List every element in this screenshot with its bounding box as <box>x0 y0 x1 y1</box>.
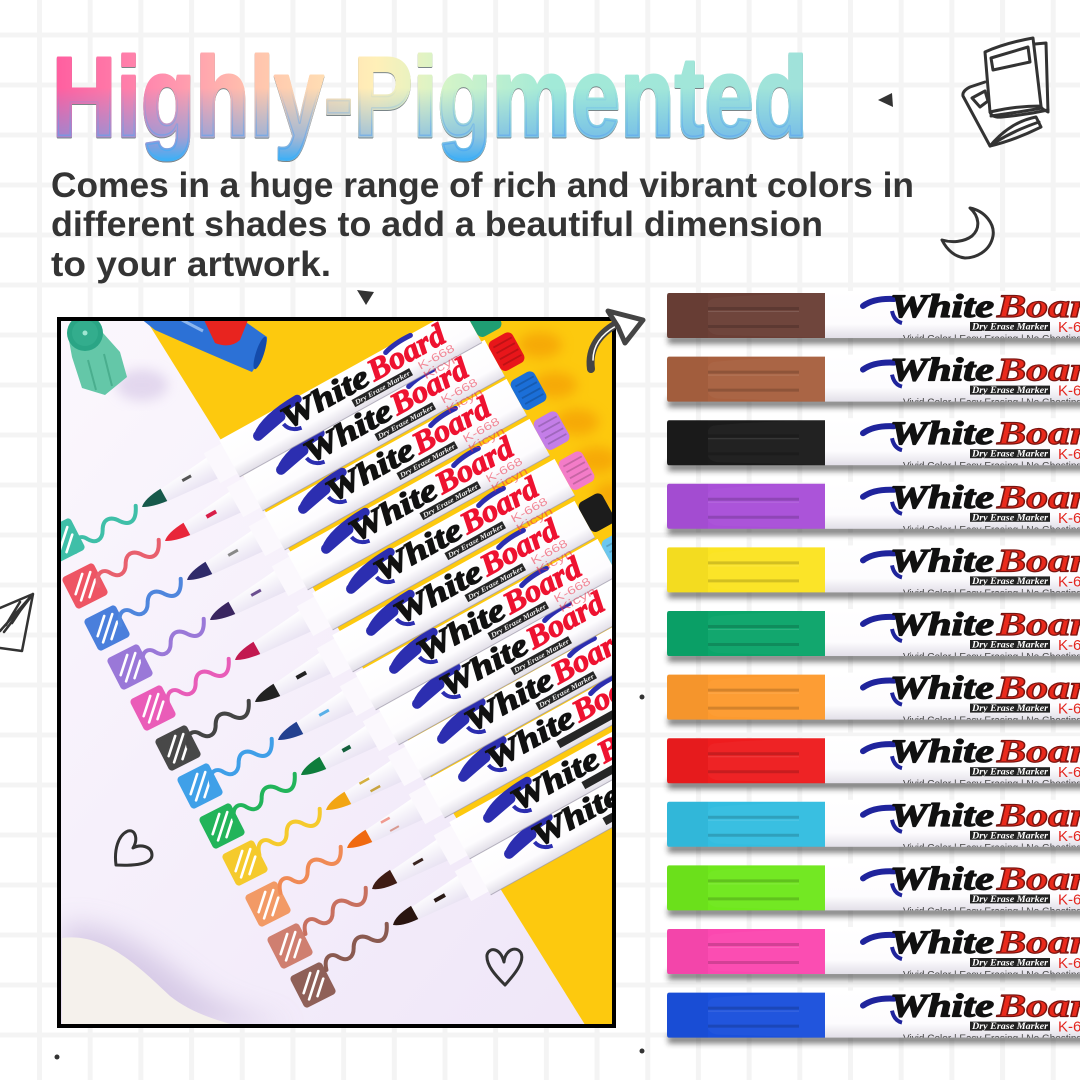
subtitle text: Comes in a huge range of rich and vibrant colors in <box>51 166 914 205</box>
marker row 3: black <box>667 416 1080 472</box>
marker row 9: sky blue: Board <box>996 798 1080 834</box>
marker row 8: red: Dry Erase Marker <box>971 767 1049 777</box>
dot <box>640 694 644 700</box>
marker row 1: brown <box>667 289 1080 345</box>
subtitle text: to your artwork. <box>51 245 331 284</box>
marker row 8: red: Board <box>996 734 1080 770</box>
marker row 8: red: White <box>890 734 994 770</box>
icon: books <box>963 38 1048 146</box>
marker row 1: brown: Vivid Color | Easy Erasing | No Ghosting <box>903 334 1080 345</box>
marker row 5: yellow: White <box>890 543 994 579</box>
marker row 2: terracotta: Board <box>996 353 1080 389</box>
marker 9 yellow <box>256 628 612 856</box>
marker 7 sky blue: Dry Erase Marker <box>488 602 548 640</box>
marker row 3: black: Board <box>996 416 1080 452</box>
marker 4 purple: K-668 <box>484 456 525 485</box>
photo frame <box>59 319 614 1026</box>
marker 7 sky blue: White <box>410 591 511 669</box>
icon: tilted heart <box>116 831 152 865</box>
marker 12 brown <box>324 780 612 972</box>
icon: small triangle top right <box>878 93 893 107</box>
icon: small triangle above photo <box>357 290 374 305</box>
marker 6 black: Board <box>473 511 565 583</box>
marker row 12: blue: Board <box>996 989 1080 1025</box>
marker row 1: brown: White <box>890 289 994 325</box>
marker 1 teal: Dry Erase Marker <box>352 369 412 407</box>
marker row 7: orange: Vivid Color | Easy Erasing | No Ghosting <box>903 716 1080 727</box>
marker 8 green: Board <box>519 584 611 656</box>
marker 6 black: White <box>387 553 488 631</box>
yellow card <box>145 318 616 1028</box>
marker 11 terracotta <box>302 732 612 936</box>
marker 2 red: White <box>297 392 398 470</box>
marker row 9: sky blue <box>667 798 1080 854</box>
marker row 12: blue <box>667 989 1080 1045</box>
marker 5 pink: Dry Erase Marker <box>445 522 505 560</box>
marker 2 red: K-668 <box>439 377 480 406</box>
scribble squares <box>40 519 335 1007</box>
marker row 9: sky blue: White <box>890 798 994 834</box>
marker 2 red <box>96 332 524 588</box>
marker row 7: orange: Board <box>996 671 1080 707</box>
marker 3 blue <box>118 371 546 624</box>
marker row 11: pink: Board <box>996 925 1080 961</box>
marker row 2: terracotta <box>667 353 1080 409</box>
subtitle text: different shades to add a beautiful dimension <box>51 205 823 244</box>
marker row 10: lime: White <box>890 861 994 897</box>
marker 3 blue: Dry Erase Marker <box>397 442 457 480</box>
marker 6 black: Dry Erase Marker <box>465 564 525 602</box>
marker row 2: terracotta: White <box>890 353 994 389</box>
marker row 12: blue: White <box>890 989 994 1025</box>
icon: heart <box>487 949 522 985</box>
marker 5 pink: White <box>367 511 468 589</box>
marker 8 green: White <box>433 626 534 704</box>
marker 3 blue: White <box>319 431 420 509</box>
marker row 5: yellow <box>667 543 1080 599</box>
marker row 8: red <box>667 734 1080 790</box>
marker 7 sky blue: Board <box>496 549 588 621</box>
marker row 6: green: White <box>890 607 994 643</box>
marker 7 sky blue: Kicyn <box>557 585 598 615</box>
marker row 7: orange <box>667 671 1080 727</box>
marker 4 purple: Board <box>428 429 520 501</box>
marker 7 sky blue: K-668 <box>552 576 593 605</box>
marker 9 yellow: Board <box>544 619 636 691</box>
marker 4 purple: Dry Erase Marker <box>420 482 480 520</box>
marker row 1: brown: Dry Erase Marker <box>971 322 1049 332</box>
marker 7 sky blue <box>208 536 612 786</box>
marker row 3: black: Dry Erase Marker <box>971 449 1049 459</box>
marker row 3: black: White <box>890 416 994 452</box>
marker 8 green <box>232 579 612 822</box>
marker 1 teal: White <box>274 358 375 436</box>
marker row 4: purple <box>667 480 1080 536</box>
marker row 4: purple: Vivid Color | Easy Erasing | No Ghosting <box>903 525 1080 536</box>
marker 9 yellow: Dry Erase Marker <box>536 672 596 710</box>
marker row 5: yellow: Dry Erase Marker <box>971 576 1049 586</box>
marker row 11: pink: Vivid Color | Easy Erasing | No Ghosting <box>903 970 1080 981</box>
blue marker and red cap on top edge <box>140 318 269 372</box>
marker 5 pink: Board <box>453 469 545 541</box>
marker 2 red: Kicyn <box>444 386 485 416</box>
marker row 10: lime: Vivid Color | Easy Erasing | No Ghosting <box>903 906 1080 917</box>
marker row 6: green <box>667 607 1080 663</box>
icon: paper plane <box>0 594 33 651</box>
cap shadows on yellow <box>516 328 612 511</box>
icon: curved arrow <box>591 311 643 369</box>
marker 10 orange <box>278 676 612 895</box>
marker 3 blue: K-668 <box>461 416 502 445</box>
marker row 11: pink: White <box>890 925 994 961</box>
marker row 10: lime: Dry Erase Marker <box>971 894 1049 904</box>
teal cap shadow <box>116 369 168 401</box>
marker 2 red: Board <box>383 350 475 422</box>
marker row 10: lime <box>667 861 1080 917</box>
marker row 2: terracotta: Dry Erase Marker <box>971 385 1049 395</box>
marker row 9: sky blue: Vivid Color | Easy Erasing | No Ghosting <box>903 843 1080 854</box>
marker row 4: purple: Dry Erase Marker <box>971 512 1049 522</box>
marker 5 pink <box>166 451 594 702</box>
marker row 7: orange: Dry Erase Marker <box>971 703 1049 713</box>
marker 8 green: Dry Erase Marker <box>511 637 571 675</box>
marker 4 purple: White <box>342 471 443 549</box>
teal cap <box>67 315 127 395</box>
marker 3 blue: Board <box>405 389 497 461</box>
marker row 5: yellow: Board <box>996 543 1080 579</box>
photo: markers on paper <box>61 321 612 1024</box>
marker 11 terracotta: Board <box>590 698 682 770</box>
marker row 11: pink <box>667 925 1080 981</box>
marker row 12: blue: Dry Erase Marker <box>971 1021 1049 1031</box>
marker 4 purple: Kicyn <box>489 465 530 495</box>
dot <box>54 1054 60 1060</box>
marker row 7: orange: White <box>890 671 994 707</box>
marker 11 terracotta: White <box>504 740 605 818</box>
marker row 6: green: Vivid Color | Easy Erasing | No Ghosting <box>903 652 1080 663</box>
marker row 9: sky blue: Dry Erase Marker <box>971 830 1049 840</box>
marker 12 brown: Board <box>611 734 703 806</box>
marker row 5: yellow: Vivid Color | Easy Erasing | No Ghosting <box>903 588 1080 599</box>
marker row 8: red: Vivid Color | Easy Erasing | No Ghosting <box>903 779 1080 790</box>
marker 1 teal: Board <box>360 316 452 388</box>
marker 1 teal: K-668 <box>416 343 457 372</box>
marker 5 pink: K-668 <box>509 496 550 525</box>
marker 4 purple <box>140 411 570 662</box>
title: Highly-Pigmented <box>52 34 808 160</box>
marker 1 teal <box>76 321 502 554</box>
marker 10 orange: White <box>479 699 580 777</box>
marker row 12: blue: Vivid Color | Easy Erasing | No Ghosting <box>903 1034 1080 1045</box>
marker row 11: pink: Dry Erase Marker <box>971 958 1049 968</box>
marker 9 yellow: White <box>458 661 559 739</box>
dot <box>640 1048 644 1054</box>
marker 6 black: K-668 <box>529 538 570 567</box>
title: Highly-Pigmented <box>52 34 808 160</box>
marker row 4: purple: Board <box>996 480 1080 516</box>
subtitle text <box>51 166 914 284</box>
marker 5 pink: Kicyn <box>514 505 555 535</box>
marker 6 black: Kicyn <box>534 547 575 577</box>
marker row 2: terracotta: Vivid Color | Easy Erasing | No Ghosting <box>903 398 1080 409</box>
marker 6 black <box>186 493 612 749</box>
paper background <box>61 321 613 1024</box>
marker row 4: purple: White <box>890 480 994 516</box>
marker row 6: green: Dry Erase Marker <box>971 640 1049 650</box>
icon: moon <box>942 208 993 258</box>
marker 3 blue: Kicyn <box>466 425 507 455</box>
marker row 10: lime: Board <box>996 861 1080 897</box>
marker row 3: black: Vivid Color | Easy Erasing | No Ghosting <box>903 461 1080 472</box>
marker 2 red: Dry Erase Marker <box>375 403 435 441</box>
marker 1 teal: Kicyn <box>421 352 462 382</box>
marker 12 brown: White <box>525 776 626 854</box>
marker 10 orange: Board <box>565 657 657 729</box>
white bowl with shadow <box>62 925 290 1026</box>
marker row 1: brown: Board <box>996 289 1080 325</box>
marker row 6: green: Board <box>996 607 1080 643</box>
